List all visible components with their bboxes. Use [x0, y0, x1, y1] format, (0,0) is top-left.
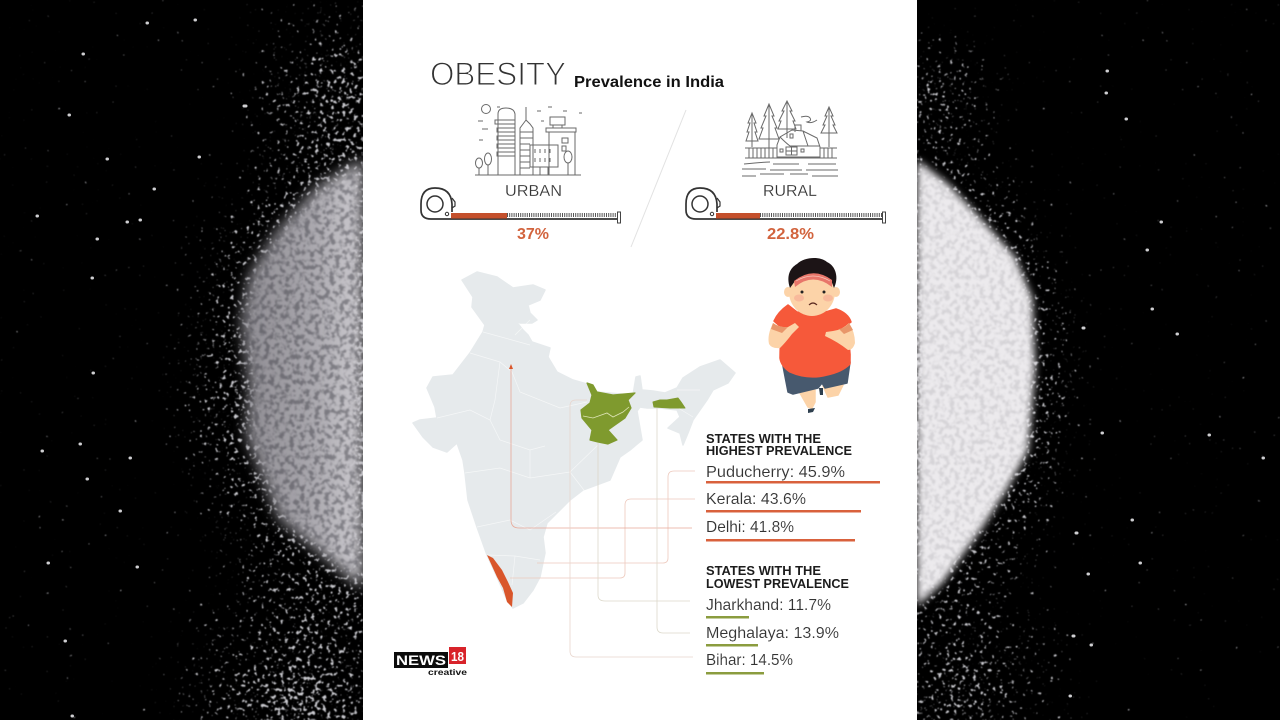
illustration: overweight jogger — [768, 258, 855, 413]
connector: Bihar — [570, 400, 693, 657]
state boundaries — [437, 320, 700, 585]
title: Prevalence in India — [574, 74, 724, 91]
panel: urban — [421, 104, 620, 243]
row: Bihar: Bihar: 14.5% — [706, 652, 793, 669]
row: Kerala: Kerala: 43.6% — [706, 491, 806, 508]
row: Delhi: Delhi: 41.8% — [706, 519, 794, 536]
boundary between Bihar and Jharkhand — [583, 407, 629, 418]
logo: News18 Creative: 18 — [451, 649, 464, 664]
marker: Delhi — [509, 364, 513, 369]
hair — [788, 258, 836, 288]
map outline — [413, 272, 735, 608]
row: Meghalaya: Meghalaya: 13.9% — [706, 625, 839, 642]
value: rural 22.8 percent: 22.8% — [767, 226, 814, 243]
heading: lowest prevalence: LOWEST PREVALENCE — [706, 577, 849, 591]
label: rural: RURAL — [763, 183, 817, 200]
face — [800, 290, 804, 294]
icon: measuring tape 22.8 percent — [686, 188, 886, 223]
connector: Meghalaya — [657, 408, 690, 633]
connector: Kerala — [510, 499, 695, 578]
state: Kerala highlighted — [487, 555, 513, 607]
row: Jharkhand: Jharkhand: 11.7% — [706, 597, 831, 614]
map of India — [413, 272, 735, 608]
row: Puducherry: Puducherry: 45.9% — [706, 464, 845, 481]
list: states with the lowest prevalence — [706, 564, 849, 674]
title: OBESITY — [430, 56, 566, 92]
shirt — [774, 305, 851, 377]
state: Meghalaya highlighted — [653, 398, 685, 408]
logo: News18 Creative: creative — [428, 667, 467, 677]
headband — [794, 273, 832, 287]
connector lines from states to labels — [509, 364, 695, 657]
heading: lowest prevalence: STATES WITH THE — [706, 564, 821, 578]
logo: News18 Creative: NEWS — [396, 652, 446, 668]
title — [430, 56, 724, 92]
connector: Delhi — [511, 368, 692, 528]
icon: measuring tape 37 percent — [421, 188, 620, 223]
divider between urban and rural — [631, 110, 686, 247]
states: Bihar and Jharkhand highlighted — [581, 383, 635, 444]
white centre panel — [363, 0, 917, 720]
arms — [768, 323, 799, 348]
heading: highest prevalence: STATES WITH THE — [706, 432, 821, 446]
heading: highest prevalence: HIGHEST PREVALENCE — [706, 444, 852, 458]
shorts — [783, 362, 850, 394]
icon: city skyline — [475, 104, 582, 175]
logo: News18 Creative — [394, 647, 467, 677]
connector: Puducherry — [537, 471, 695, 563]
head — [789, 268, 835, 316]
value: urban 37 percent: 37% — [517, 226, 549, 243]
list: states with the highest prevalence — [706, 432, 880, 542]
label: urban: URBAN — [505, 183, 562, 200]
panel: rural — [686, 101, 886, 243]
icon: barn with pine trees — [742, 101, 838, 176]
far foot and legs — [800, 390, 815, 408]
connector: Jharkhand — [598, 443, 690, 601]
